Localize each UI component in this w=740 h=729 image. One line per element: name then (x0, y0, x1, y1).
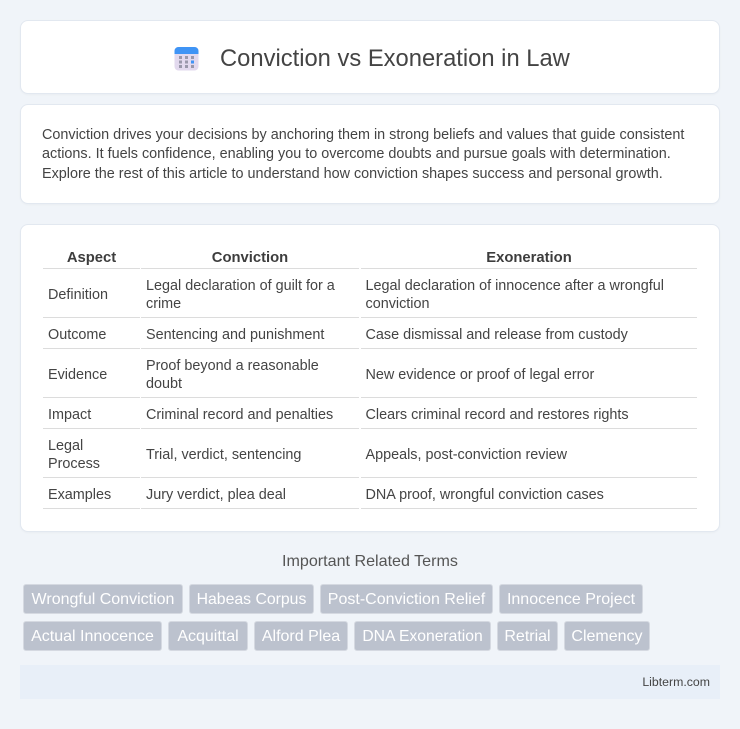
row: Legal Process: Process (48, 456, 100, 472)
row: Evidence: doubt (146, 376, 182, 392)
row: Examples: Examples (48, 487, 111, 503)
row: Legal Process (48, 438, 567, 472)
title: Conviction vs Exoneration in Law (220, 45, 570, 72)
row: Outcome: Outcome (48, 327, 106, 343)
row: Legal Process: Legal (48, 438, 83, 454)
tag: Habeas Corpus (197, 591, 306, 608)
row: Legal Process: Appeals, post-conviction review (366, 447, 567, 463)
footer credit: Libterm.com (642, 675, 710, 689)
intro text: actions. It fuels confidence, enabling you to overcome doubts and pursue goals with determination. (42, 146, 671, 162)
tag (254, 621, 348, 651)
tag: DNA Exoneration (362, 628, 483, 645)
panel: header (20, 20, 720, 94)
tag (354, 621, 491, 651)
row: Outcome: Case dismissal and release from custody (366, 327, 628, 343)
intro text (42, 127, 684, 182)
tag (320, 584, 493, 614)
tag: Innocence Project (507, 591, 635, 608)
row: Outcome: Sentencing and punishment (146, 327, 324, 343)
intro text: Conviction drives your decisions by anchoring them in strong beliefs and values that guide consistent (42, 127, 684, 143)
row: Definition: Legal declaration of guilt for a (146, 278, 335, 294)
row: Definition: Legal declaration of innocence after a wrongful (366, 278, 664, 294)
panel: introduction (20, 104, 720, 204)
row: Examples (48, 487, 604, 503)
tag: Alford Plea (262, 628, 340, 645)
row: Evidence (48, 358, 594, 392)
heading: Important Related Terms: Important Related Terms (282, 552, 458, 570)
tag (189, 584, 314, 614)
intro text: Explore the rest of this article to understand how conviction shapes success and personal growth. (42, 166, 663, 182)
tag (23, 621, 162, 651)
row: Examples: Jury verdict, plea deal (146, 487, 286, 503)
row: Definition: Definition (48, 287, 108, 303)
row: Impact: Impact (48, 407, 91, 423)
row: Evidence: Evidence (48, 367, 107, 383)
table header (67, 250, 572, 266)
row: Legal Process: Trial, verdict, sentencing (146, 447, 301, 463)
tag: Acquittal (177, 628, 239, 645)
row: Impact: Criminal record and penalties (146, 407, 333, 423)
tag (497, 621, 558, 651)
row: Definition (48, 278, 664, 312)
row: Evidence: Proof beyond a reasonable (146, 358, 319, 374)
tag (168, 621, 248, 651)
row: Impact (48, 407, 629, 423)
row: Outcome (48, 327, 628, 343)
related term tags (23, 584, 650, 651)
footer bar (20, 665, 720, 699)
tag: Actual Innocence (31, 628, 154, 645)
row: Evidence: New evidence or proof of legal error (366, 367, 594, 383)
panel: comparison table (20, 224, 720, 532)
tag (23, 584, 183, 614)
tag: Wrongful Conviction (32, 591, 174, 608)
tag (499, 584, 643, 614)
tag (564, 621, 650, 651)
icon: calendar (174, 47, 198, 70)
tag: Retrial (504, 628, 551, 645)
table header: Aspect (67, 250, 116, 266)
row: Definition: crime (146, 296, 181, 312)
table header: Conviction (212, 250, 288, 266)
row: Impact: Clears criminal record and restores rights (366, 407, 629, 423)
table header: Exoneration (486, 250, 572, 266)
row: Definition: conviction (366, 296, 430, 312)
row: Examples: DNA proof, wrongful conviction cases (366, 487, 604, 503)
tag: Post-Conviction Relief (328, 591, 485, 608)
tag: Clemency (571, 628, 643, 645)
